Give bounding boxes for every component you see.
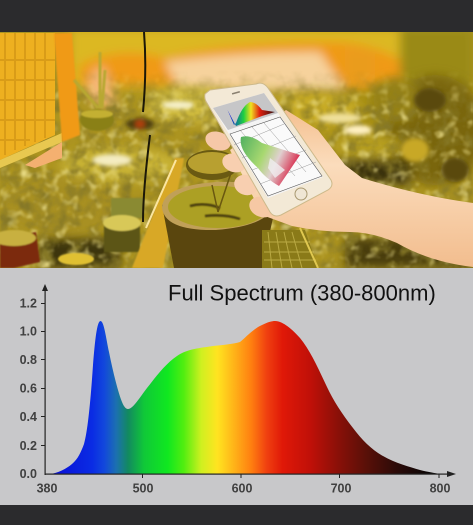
foliage texture (0, 70, 473, 268)
room background (0, 32, 473, 268)
orange pillar (54, 33, 80, 142)
wire shelf under hand (262, 230, 318, 268)
small pot behind hand (186, 150, 238, 180)
x axis labels: 380 (37, 482, 57, 496)
axes (41, 284, 456, 478)
fingers (206, 132, 230, 150)
plant masses (0, 75, 473, 268)
phone screen (214, 109, 323, 198)
earpiece (232, 91, 240, 95)
photo: grow room with plants under yellow light (0, 28, 473, 268)
y axis labels: 0.8 (20, 353, 37, 367)
back wall and ceiling (70, 28, 473, 133)
y axis labels: 0.2 (20, 439, 37, 453)
x axis labels: 800 (430, 482, 450, 496)
aloe plant and pot (74, 52, 114, 131)
vertical black cables (143, 32, 150, 222)
y axis labels: 1.0 (20, 324, 37, 338)
phone body (205, 83, 332, 216)
shelf rail (132, 158, 184, 268)
y axis labels: 0.0 (20, 467, 37, 481)
left tiled wall (0, 33, 62, 168)
x axis labels: 700 (331, 482, 351, 496)
forearm and palm (230, 110, 473, 267)
x axis labels: 500 (133, 482, 153, 496)
highlights among plants (92, 88, 469, 182)
x axis labels: 600 (232, 482, 252, 496)
y axis labels: 1.2 (20, 296, 37, 310)
y axis labels (20, 296, 37, 481)
top dark band (0, 0, 473, 32)
large plant pot (162, 170, 278, 268)
chart title: Full Spectrum (380-800nm) (168, 280, 436, 306)
spectrum curve (50, 321, 440, 474)
spectrum chart panel (0, 268, 473, 505)
bottom dark band (0, 505, 473, 525)
x axis labels (37, 482, 450, 496)
screen mini spectrum (228, 102, 275, 126)
small pots and red pot (0, 198, 143, 268)
y axis labels: 0.4 (20, 410, 37, 424)
y axis labels: 0.6 (20, 382, 37, 396)
screen chromaticity chart (230, 117, 322, 196)
home button (295, 188, 307, 200)
screen spectrum panel (213, 93, 278, 130)
hand holding phone (203, 83, 473, 267)
